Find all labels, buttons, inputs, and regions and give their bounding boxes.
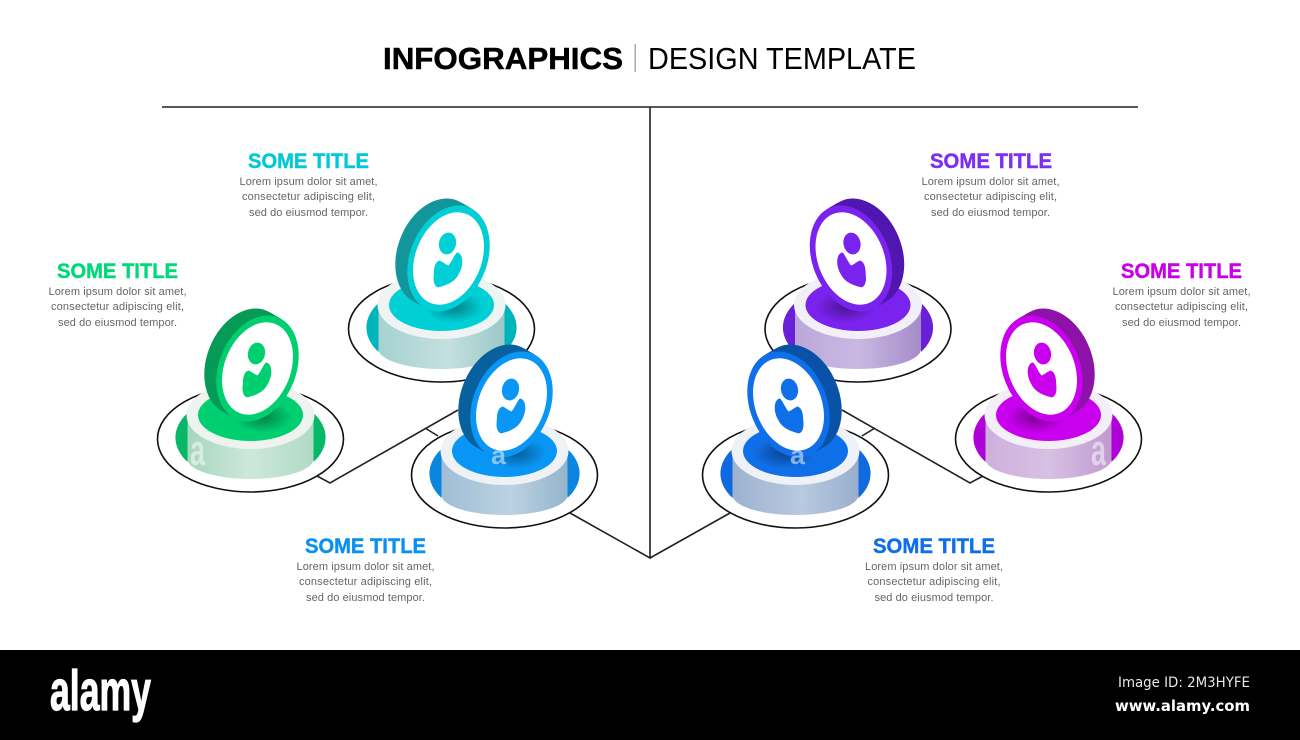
text block: teal (240, 149, 378, 219)
unit: blue (412, 332, 598, 528)
text block: purple: Lorem ipsum dolor sit amet, (922, 176, 1060, 188)
footer image id and url: www.alamy.com (1115, 697, 1250, 715)
text block: royal blue (865, 534, 1003, 604)
text block: royal blue: consectetur adipiscing elit, (868, 576, 1000, 588)
text block: magenta: sed do eiusmod tempor. (1122, 317, 1241, 329)
watermark letters: a (491, 440, 507, 470)
unit: royal blue (702, 332, 888, 528)
text block: royal blue: sed do eiusmod tempor. (874, 592, 994, 604)
footer bar (0, 650, 1300, 740)
text block: blue: SOME TITLE (305, 534, 426, 558)
text block: magenta: consectetur adipiscing elit, (1115, 301, 1248, 313)
text block: purple: sed do eiusmod tempor. (931, 207, 1050, 219)
watermark letters: a (1091, 426, 1106, 475)
header title (383, 41, 916, 76)
unit: magenta (956, 296, 1142, 492)
header title: INFOGRAPHICS (383, 41, 623, 76)
text block: magenta: SOME TITLE (1121, 259, 1242, 283)
text block: green: consectetur adipiscing elit, (51, 301, 184, 313)
text block: blue (296, 534, 434, 604)
text block: magenta (1112, 259, 1250, 329)
text block: green: sed do eiusmod tempor. (58, 317, 177, 329)
text block: teal: consectetur adipiscing elit, (242, 191, 375, 203)
text block: green: SOME TITLE (57, 259, 178, 283)
watermark letters (190, 426, 1106, 475)
footer image id and url: Image ID: 2M3HYFE (1118, 675, 1250, 691)
text block: purple: consectetur adipiscing elit, (924, 191, 1057, 203)
text block: purple: SOME TITLE (930, 149, 1052, 173)
text block: blue: Lorem ipsum dolor sit amet, (296, 561, 434, 573)
header title: DESIGN TEMPLATE (648, 41, 916, 76)
text block: magenta: Lorem ipsum dolor sit amet, (1112, 286, 1250, 298)
text block: blue: consectetur adipiscing elit, (299, 576, 432, 588)
text block: green (48, 259, 186, 329)
text block: purple (922, 149, 1060, 219)
unit: teal (348, 186, 534, 382)
text block: royal blue: SOME TITLE (873, 534, 995, 558)
watermark letters: a (190, 426, 205, 475)
text block: teal: Lorem ipsum dolor sit amet, (240, 176, 378, 188)
text block: teal: sed do eiusmod tempor. (249, 207, 368, 219)
unit: purple (765, 186, 951, 382)
watermark letters: a (790, 440, 806, 470)
connector lines (162, 107, 1138, 558)
text block: royal blue: Lorem ipsum dolor sit amet, (865, 561, 1003, 573)
footer logo: alamy (50, 659, 151, 723)
text block: teal: SOME TITLE (248, 149, 369, 173)
footer image id and url (1115, 675, 1250, 715)
text block: green: Lorem ipsum dolor sit amet, (48, 286, 186, 298)
unit: green (158, 296, 344, 492)
text block: blue: sed do eiusmod tempor. (306, 592, 425, 604)
